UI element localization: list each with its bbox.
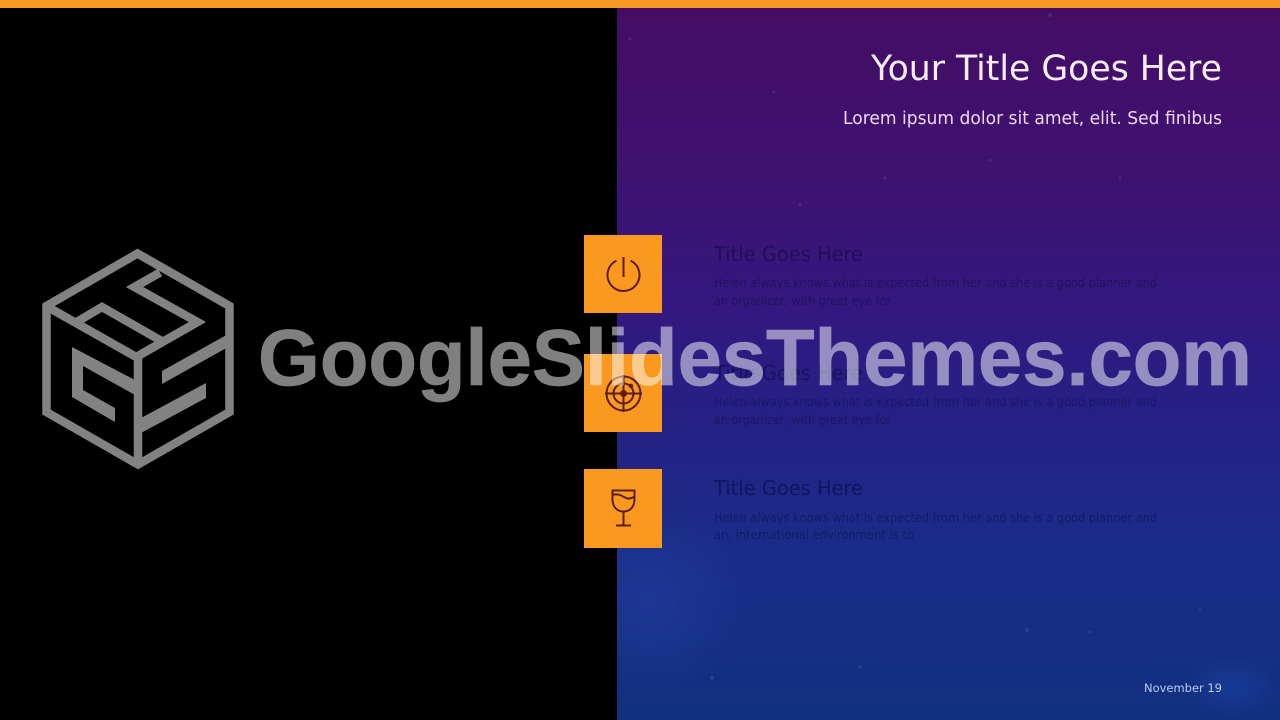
date footer: November 19 bbox=[1144, 681, 1222, 695]
item 1 text: Helen always knows what is expected from her and she is a good planner and bbox=[714, 276, 1157, 290]
icon tile: power bbox=[584, 235, 662, 313]
icon tile: wine glass bbox=[584, 469, 662, 548]
icon tile: target bbox=[584, 354, 662, 432]
panel: starry gradient background bbox=[617, 8, 1280, 720]
item 3 text: Helen always knows what is expected from her and she is a good planner and bbox=[714, 511, 1157, 525]
black left panel bbox=[0, 0, 617, 720]
item 1 bbox=[584, 235, 1157, 313]
item 2 text bbox=[714, 395, 1157, 427]
item 1 heading: Title Goes Here bbox=[713, 242, 863, 266]
logo: cube mark bbox=[46, 254, 230, 465]
item 2 heading: Title Goes Here bbox=[713, 361, 863, 385]
item 1 text bbox=[714, 276, 1157, 308]
item 2 text: an organizer, with great eye for bbox=[714, 413, 891, 427]
item 2 text: Helen always knows what is expected from her and she is a good planner and bbox=[714, 395, 1157, 409]
title: Your Title Goes Here bbox=[870, 49, 1222, 89]
item 2 bbox=[584, 354, 1157, 432]
watermark text: GoogleSlidesThemes.com bbox=[258, 313, 1252, 402]
item 3 text: an, international environment is to bbox=[714, 528, 914, 542]
item 3 heading: Title Goes Here bbox=[713, 476, 863, 500]
item 3 text bbox=[714, 511, 1157, 542]
item 3 bbox=[584, 469, 1157, 548]
top orange bar bbox=[0, 0, 1280, 8]
subtitle: Lorem ipsum dolor sit amet, elit. Sed finibus bbox=[843, 108, 1222, 129]
item 1 text: an organizer, with great eye for bbox=[714, 294, 891, 308]
